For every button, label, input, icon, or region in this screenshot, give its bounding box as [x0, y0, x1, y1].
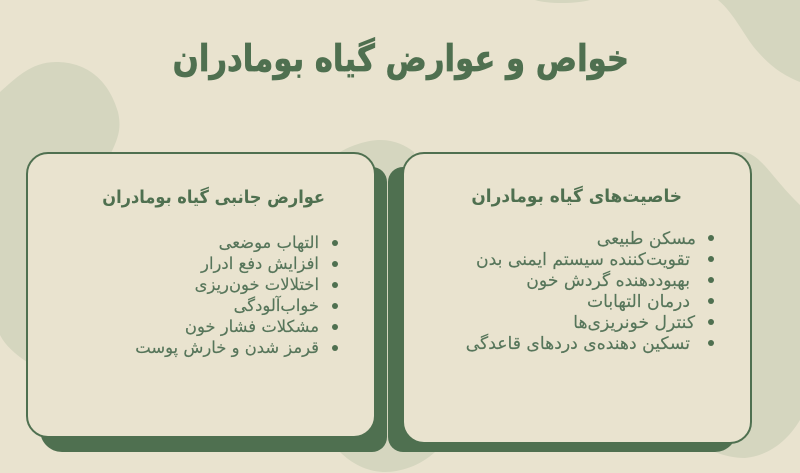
shadow: left card — [40, 167, 387, 452]
heading: side effects: عوارض جانبی گیاه بومادران — [102, 187, 325, 208]
title: خواص و عوارض گیاه بومادران — [173, 37, 629, 80]
bullet — [708, 256, 714, 262]
item 3: اختلالات خون‌ریزی — [195, 275, 319, 294]
item 2: تقویت‌کننده سیستم ایمنی بدن — [476, 250, 690, 270]
bullet — [708, 298, 714, 304]
bullet — [708, 319, 714, 325]
list: properties — [466, 229, 714, 354]
bullet — [332, 282, 338, 288]
bullet — [332, 240, 338, 246]
list: side effects — [135, 233, 338, 358]
item 3: بهبوددهنده گردش خون — [526, 271, 690, 291]
item 1: التهاب موضعی — [219, 233, 319, 252]
panel: properties — [402, 152, 752, 444]
item 1: مسکن طبیعی — [597, 229, 696, 249]
item 5: مشکلات فشار خون — [185, 317, 319, 336]
item 4: درمان التهابات — [587, 292, 690, 312]
item 6: تسکین دهنده‌ی دردهای قاعدگی — [466, 334, 690, 354]
bullet — [332, 345, 338, 351]
item 6: قرمز شدن و خارش پوست — [135, 338, 319, 357]
bullet — [332, 261, 338, 267]
panel: side effects — [26, 152, 376, 438]
bullet — [332, 324, 338, 330]
item 5: کنترل خونریزی‌ها — [573, 313, 695, 333]
item 2: افزایش دفع ادرار — [201, 254, 319, 273]
shadow: right card — [388, 167, 737, 452]
bullet — [708, 340, 714, 346]
bullet — [708, 277, 714, 283]
heading: properties: خاصیت‌های گیاه بومادران — [471, 186, 682, 207]
bullet — [332, 303, 338, 309]
bullet — [708, 235, 714, 241]
item 4: خواب‌آلودگی — [234, 296, 319, 315]
